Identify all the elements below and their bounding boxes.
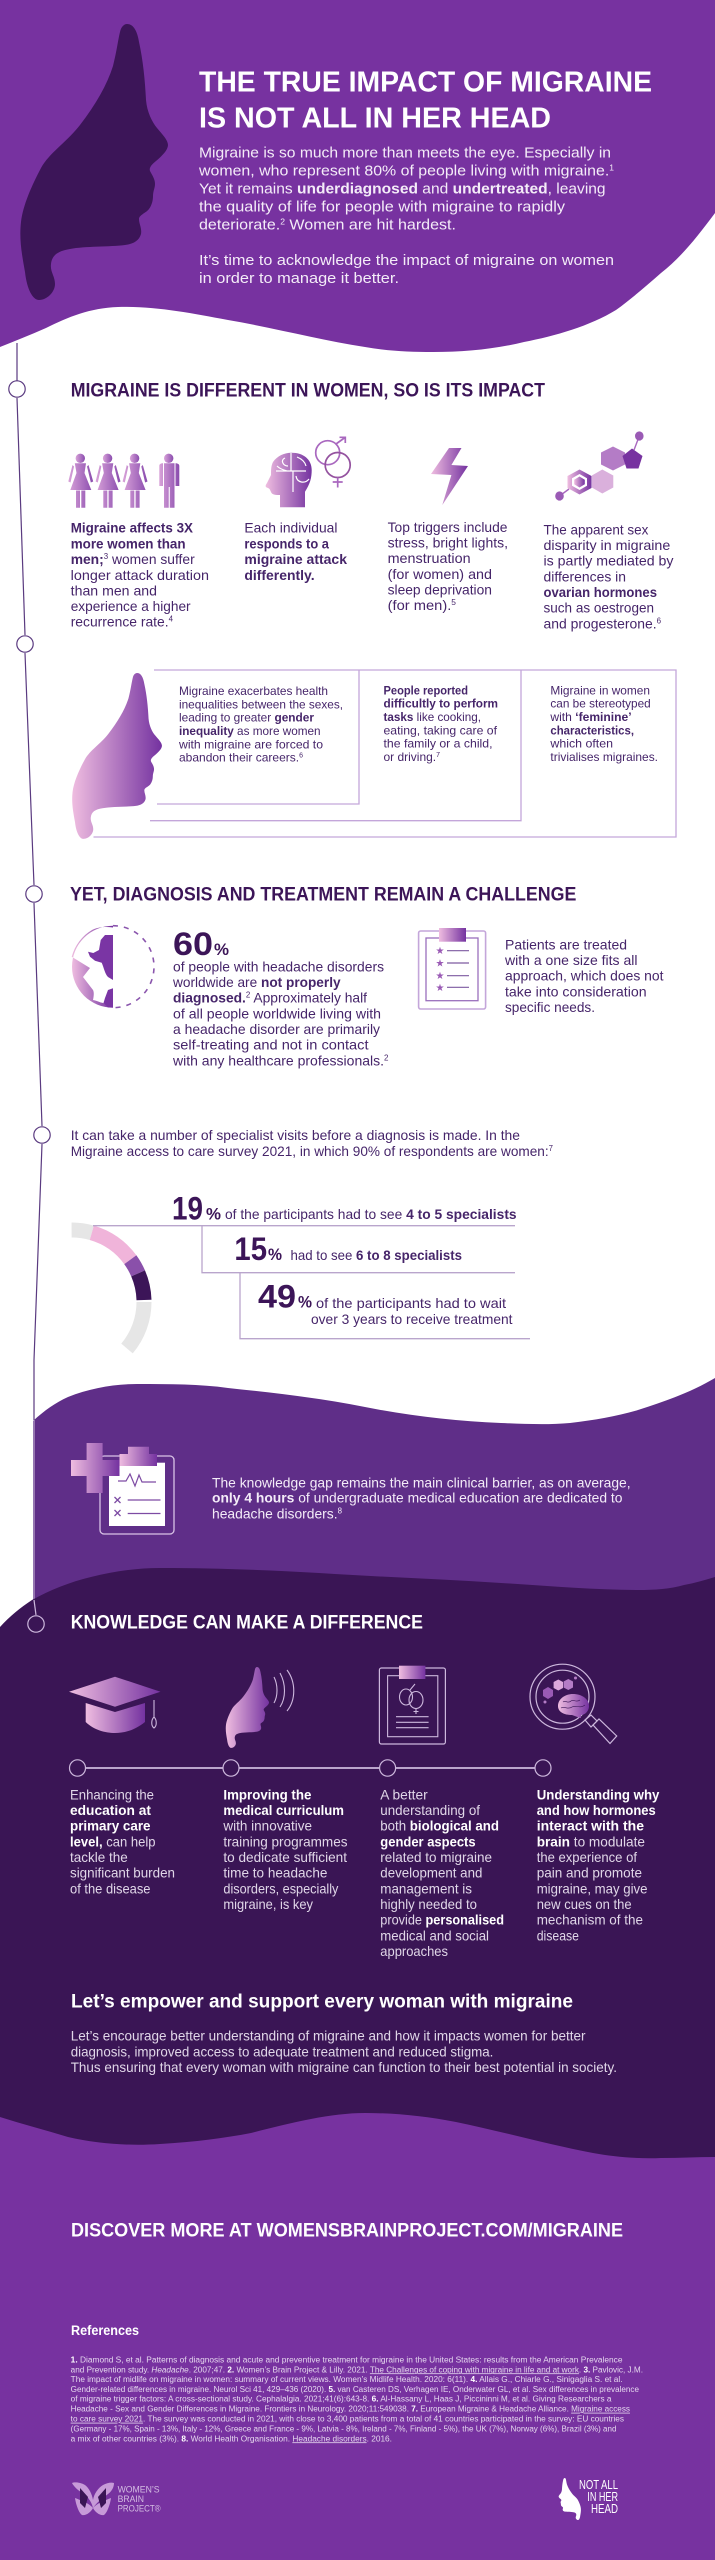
column: hormones and brain: new cues on the xyxy=(537,1896,632,1912)
column: biological and gender: gender aspects xyxy=(380,1833,476,1849)
heading: empower: Let’s empower and support every woman with migraine xyxy=(71,1992,573,2013)
text: not properly diagnosed xyxy=(172,958,389,1068)
text: one size fits all: specific needs. xyxy=(505,999,595,1015)
column: biological and gender: medical and social xyxy=(380,1927,489,1943)
column: primary care: level, can help xyxy=(70,1833,156,1849)
column: biological and gender: A better xyxy=(380,1786,428,1802)
intro text: deteriorate. xyxy=(199,216,275,233)
column: curriculum: time to headache xyxy=(223,1865,328,1881)
references text xyxy=(71,2355,643,2443)
panel text: daily tasks: the family or a child, xyxy=(384,737,492,751)
stat: 49 percent: over 3 years to receive treatment xyxy=(311,1311,513,1327)
intro text: Women are hit hardest. xyxy=(285,216,456,233)
panel text: inequality xyxy=(178,684,343,765)
column: hormones and brain: pain and promote xyxy=(537,1865,642,1881)
column: 3X more women: than men and xyxy=(71,582,157,598)
frames for survey stats xyxy=(93,1226,530,1339)
timeline segment along band xyxy=(34,1420,36,1615)
intro text: It’s time to acknowledge the impact of migraine on women xyxy=(199,252,614,269)
panel text: daily tasks: People reported xyxy=(384,683,468,697)
panel text: stereotypes: characteristics, xyxy=(550,723,634,737)
column: top triggers: sleep deprivation xyxy=(388,582,492,598)
text: empower paragraph: diagnosis, improved access to adequate treatment and reduced stigma. xyxy=(71,2043,493,2059)
icon: speaking face xyxy=(226,1667,294,1748)
column: 3X more women: experience a higher xyxy=(71,598,191,614)
column: primary care: education at xyxy=(70,1802,151,1818)
icon: checklist clipboard xyxy=(419,928,486,1009)
text: not properly diagnosed: diagnosed. xyxy=(173,990,246,1006)
column: biological and gender: provide personalised xyxy=(380,1912,504,1928)
column: hormones and brain: disease xyxy=(537,1927,579,1943)
column: top triggers: (for women) and xyxy=(388,566,492,582)
panel text: inequality: inequality as more women xyxy=(179,724,321,738)
column: individual response: responds to a xyxy=(244,535,329,551)
column: biological and gender: both biological and xyxy=(380,1818,499,1834)
column: 3X more women: women suffer xyxy=(108,551,195,567)
references text: and Prevention study. Headache. 2007;47. 2. Women’s Brain Project & Lilly. 2021. The Challenges of coping with migraine in life and at work . 3. Pavlovic, J.M. xyxy=(71,2365,643,2374)
column: hormones and brain: and how hormones xyxy=(537,1802,656,1818)
column: primary care: significant burden xyxy=(70,1865,175,1881)
column: curriculum: migraine, is key xyxy=(223,1896,313,1912)
heading: diagnosis challenge: YET, DIAGNOSIS AND TREATMENT REMAIN A CHALLENGE xyxy=(70,885,576,906)
stat: 19 percent: of the participants had to see 4 to 5 specialists xyxy=(225,1206,517,1222)
panel text: stereotypes: which often xyxy=(549,737,613,751)
icon: checklist clipboard: ★ xyxy=(436,958,444,970)
text: not properly diagnosed: of all people worldwide living with xyxy=(173,1005,381,1021)
column: 3X more women: longer attack duration xyxy=(71,567,209,583)
icon: three women and one man xyxy=(68,454,179,508)
column: 3X more women: men; xyxy=(71,551,104,567)
icon: checklist clipboard: ★ xyxy=(436,946,444,957)
panel text: inequality: inequalities between the sexes, xyxy=(179,697,343,711)
section band: knowledge gap xyxy=(33,1378,715,1660)
panel text: daily tasks xyxy=(384,683,498,764)
text: knowledge gap: The knowledge gap remains the main clinical barrier, as on average, xyxy=(212,1474,631,1490)
panel texts: impact on women xyxy=(178,683,658,765)
logo: Not All In Her Head: NOT ALL xyxy=(579,2477,618,2492)
column: biological and gender: highly needed to xyxy=(380,1896,477,1912)
icon: 60 percent head circle xyxy=(72,926,154,1008)
stat: 49 percent: of the participants had to wait xyxy=(316,1295,506,1311)
column: individual response: migraine attack xyxy=(244,551,347,567)
column: 3X more women: 3 xyxy=(104,552,109,561)
title: THE TRUE IMPACT OF MIGRAINE xyxy=(199,67,652,99)
stat: 15 percent: % xyxy=(268,1245,282,1264)
text: not properly diagnosed: 2 xyxy=(246,991,251,1000)
logo: Not All In Her Head xyxy=(559,2477,618,2520)
column: biological and gender: related to migraine xyxy=(380,1849,492,1865)
text: empower paragraph: Thus ensuring that every woman with migraine can function to their best potential in society. xyxy=(71,2059,617,2075)
text: not properly diagnosed: with any healthcare professionals. xyxy=(173,1052,384,1068)
icon: hormone molecule xyxy=(555,431,644,501)
logo: Not All In Her Head: IN HER xyxy=(587,2489,618,2504)
column: ovarian hormones: such as oestrogen xyxy=(544,600,654,616)
column: ovarian hormones: 6 xyxy=(657,616,662,625)
column: ovarian hormones: and progesterone. xyxy=(544,615,657,631)
intro text xyxy=(198,145,615,287)
text: empower paragraph: Let’s encourage better understanding of migraine and how it impacts women for better xyxy=(71,2028,586,2044)
icon: lightning bolt xyxy=(431,448,468,505)
column: 3X more women: more women than xyxy=(71,535,186,551)
logo: Women's Brain Project: WOMEN’S xyxy=(118,2485,160,2495)
column: curriculum: with innovative xyxy=(222,1818,312,1834)
text: specialist visits intro: It can take a number of specialist visits before a diagnosis is made. In the xyxy=(71,1127,520,1143)
timeline xyxy=(9,343,50,1420)
references text: Headache - Sex and Gender Differences in Migraine. Frontiers in Neurology. 2020;11:549038. 7. European Migraine & Headache Alliance. Migraine access xyxy=(71,2405,630,2414)
call to action: DISCOVER MORE AT WOMENSBRAINPROJECT.COM/MIGRAINE xyxy=(71,2221,623,2242)
text: four knowledge columns xyxy=(70,1786,660,1959)
icon: magnifier with molecule and brain xyxy=(530,1664,617,1744)
icon: dark face silhouette xyxy=(20,24,168,300)
column: curriculum: to dedicate sufficient xyxy=(223,1849,347,1865)
column: biological and gender xyxy=(380,1786,504,1959)
logo: Women's Brain Project: PROJECT® xyxy=(118,2504,161,2514)
text: specialist visits intro: 7 xyxy=(549,1144,554,1153)
text: one size fits all: take into consideration xyxy=(505,983,647,999)
text: empower paragraph xyxy=(71,2028,617,2075)
column: hormones and brain: mechanism of the xyxy=(537,1912,643,1928)
stat: 15 percent: had to see 6 to 8 specialists xyxy=(290,1247,462,1263)
column: primary care: of the disease xyxy=(70,1880,151,1896)
column: top triggers xyxy=(388,519,508,613)
intro text: 2 xyxy=(280,217,286,226)
panel text: inequality: with migraine are forced to xyxy=(178,737,323,751)
icon: gradient face profile xyxy=(72,673,162,839)
references heading: References xyxy=(71,2323,139,2338)
stat: 49 percent: 49 xyxy=(258,1279,296,1315)
text: not properly diagnosed: self-treating and not in contact xyxy=(173,1037,369,1053)
column: individual response xyxy=(244,520,347,583)
column: ovarian hormones: disparity in migraine xyxy=(544,537,671,553)
column: hormones and brain: Understanding why xyxy=(537,1786,660,1802)
column: 3X more women xyxy=(71,520,209,630)
column: top triggers: 5 xyxy=(451,598,457,607)
stat: 19 percent xyxy=(172,1190,517,1226)
text: knowledge gap: 8 xyxy=(338,1506,343,1515)
text: stat columns xyxy=(71,519,673,631)
logo: Women's Brain Project xyxy=(72,2482,161,2515)
references text: a mix of other countries (3%). 8. World Health Organisation. Headache disorders . 2016. xyxy=(71,2434,392,2443)
stat: 15 percent: 15 xyxy=(234,1231,267,1267)
panel text: stereotypes: can be stereotyped xyxy=(550,697,651,711)
column: top triggers: Top triggers include xyxy=(388,519,508,535)
stat: 60 percent xyxy=(173,926,229,962)
timeline: four steps xyxy=(70,1760,551,1776)
stat: 60 percent: 60 xyxy=(173,926,213,962)
column: biological and gender: development and xyxy=(380,1865,482,1881)
column: hormones and brain: brain to modulate xyxy=(537,1833,645,1849)
column: curriculum xyxy=(222,1786,348,1912)
stat: 15 percent xyxy=(234,1231,462,1267)
column: curriculum: training programmes xyxy=(223,1833,348,1849)
stat: 60 percent: % xyxy=(214,940,229,959)
panel text: inequality: leading to greater gender xyxy=(179,711,314,725)
stat: 19 percent: % xyxy=(206,1204,221,1223)
text: one size fits all: Patients are treated xyxy=(505,936,627,952)
references text: The impact of midlife on migraine in women: summary of current views. Women’s Midlife Health. 2020: 6(11). 4. Allais G., Chiarle G., Sinigaglia S. et al. xyxy=(71,2375,622,2384)
intro text: women, who represent 80% of people living with migraine. xyxy=(199,163,586,180)
panel text: inequality: abandon their careers. xyxy=(179,751,299,765)
text: one size fits all: with a one size fits all xyxy=(504,952,638,968)
text: not properly diagnosed: of people with headache disorders xyxy=(173,958,384,974)
text: knowledge gap xyxy=(212,1474,631,1521)
column: biological and gender: management is xyxy=(380,1880,472,1896)
panel text: stereotypes xyxy=(549,683,658,764)
icon: checklist clipboard: ★ xyxy=(436,971,444,982)
intro text: in order to manage it better. xyxy=(199,270,399,287)
text: not properly diagnosed: 2 xyxy=(384,1053,389,1062)
intro text: Migraine is so much more than meets the eye. Especially in xyxy=(199,145,611,162)
column: top triggers: stress, bright lights, xyxy=(388,535,508,551)
heading: knowledge: KNOWLEDGE CAN MAKE A DIFFERENCE xyxy=(71,1612,423,1633)
icon: head with puzzle and gender symbols xyxy=(266,437,350,507)
column: hormones and brain: interact with the xyxy=(537,1818,644,1834)
column: biological and gender: understanding of xyxy=(380,1802,480,1818)
panel text: daily tasks: eating, taking care of xyxy=(384,723,498,737)
column: biological and gender: approaches xyxy=(380,1943,448,1959)
title xyxy=(199,67,652,135)
column: hormones and brain xyxy=(537,1786,660,1943)
column: top triggers: menstruation xyxy=(388,550,471,566)
text: specialist visits intro: Migraine access to care survey 2021, in which 90% of respondents are women: xyxy=(71,1143,563,1159)
title: IS NOT ALL IN HER HEAD xyxy=(199,103,551,135)
text: not properly diagnosed: a headache disorder are primarily xyxy=(173,1021,380,1037)
panel text: stereotypes: trivialises migraines. xyxy=(550,750,658,764)
text: not properly diagnosed: Approximately half xyxy=(250,990,367,1006)
chart: arc of survey proportions xyxy=(72,1230,144,1348)
stat: 49 percent: % xyxy=(298,1293,312,1312)
references text: (Germany - 17%, Spain - 13%, Italy - 12%, Greece and France - 9%, Latvia - 8%, Ireland - 7%, Finland - 5%), the UK (7%), Norway (6%), Brazil (3%) and xyxy=(71,2424,616,2433)
section band: header xyxy=(0,0,715,352)
panel text: daily tasks: 7 xyxy=(436,752,440,759)
panel text: inequality: 6 xyxy=(299,753,303,760)
heading: different in women: MIGRAINE IS DIFFERENT IN WOMEN, SO IS ITS IMPACT xyxy=(71,381,545,402)
panel text: stereotypes: Migraine in women xyxy=(550,683,650,697)
column: primary care: Enhancing the xyxy=(70,1786,154,1802)
column: primary care xyxy=(70,1786,175,1896)
panel text: inequality: Migraine exacerbates health xyxy=(179,684,328,698)
column: top triggers: (for men). xyxy=(388,597,448,613)
column: ovarian hormones: ovarian hormones xyxy=(544,584,657,600)
panel text: daily tasks: or driving. xyxy=(384,750,436,764)
column: curriculum: medical curriculum xyxy=(223,1802,344,1818)
column: individual response: Each individual xyxy=(244,520,337,536)
column: individual response: differently. xyxy=(244,567,315,583)
text: specialist visits intro xyxy=(71,1127,554,1159)
section band: knowledge makes a difference xyxy=(0,1568,715,2200)
bracket frames around impact panels xyxy=(94,670,676,837)
references text: 1. Diamond S, et al. Patterns of diagnosis and acute and preventive treatment for migraine in the United States: results from the American Prevalence xyxy=(71,2355,623,2364)
text: not properly diagnosed: worldwide are not properly xyxy=(172,974,341,990)
icon: graduation cap xyxy=(69,1677,160,1733)
intro text: the quality of life for people with migraine to rapidly xyxy=(199,199,566,216)
logo: Women's Brain Project: BRAIN xyxy=(118,2494,144,2504)
intro text: Yet it remains underdiagnosed and undertreated, leaving xyxy=(199,181,606,198)
column: primary care: primary care xyxy=(70,1818,151,1834)
column: ovarian hormones: is partly mediated by xyxy=(544,553,674,569)
references text: of migraine trigger factors: A cross-sectional study. Cephalalgia. 2021;41(6):643-8. 6. Al-Hassany L, Haas J, Piccininni M, et al. Giving Researchers a xyxy=(71,2395,612,2404)
icon: cross and medical clipboard xyxy=(71,1443,174,1534)
column: ovarian hormones: The apparent sex xyxy=(544,521,648,537)
text: one size fits all: approach, which does not xyxy=(505,968,664,984)
column: hormones and brain: migraine, may give xyxy=(537,1880,648,1896)
stat: 19 percent: 19 xyxy=(172,1190,203,1226)
column: primary care: tackle the xyxy=(70,1849,128,1865)
icon: clipboard with gender symbols xyxy=(379,1666,445,1744)
column: curriculum: Improving the xyxy=(223,1786,312,1802)
column: ovarian hormones: differences in xyxy=(544,568,626,584)
panel text: stereotypes: with ‘feminine’ xyxy=(549,710,632,724)
text: knowledge gap: only 4 hours of undergraduate medical education are dedicated to xyxy=(212,1490,623,1506)
column: 3X more women: recurrence rate. xyxy=(71,614,170,630)
column: hormones and brain: the experience of xyxy=(537,1849,637,1865)
stat: 49 percent xyxy=(258,1279,513,1327)
panel text: daily tasks: tasks like cooking, xyxy=(384,710,481,724)
section band: footer xyxy=(0,2113,715,2560)
references text: Gender-related differences in migraine. Neurol Sci 41, 429–436 (2020). 5. van Casteren DS, Verhagen IE, Onderwater GL, et al. Sex differences in prevalence xyxy=(71,2385,640,2394)
timeline node: knowledge xyxy=(28,1600,44,1632)
text: one size fits all xyxy=(504,936,664,1015)
text: knowledge gap: headache disorders. xyxy=(212,1505,339,1521)
icon: checklist clipboard: ★ xyxy=(436,983,444,994)
references text: to care survey 2021 . The survey was conducted in 2021, with close to 3,400 patients from a total of 41 countries participated in the survey: EU countries xyxy=(71,2415,624,2424)
column: ovarian hormones xyxy=(544,521,674,631)
column: 3X more women: 4 xyxy=(169,615,174,624)
column: 3X more women: Migraine affects 3X xyxy=(71,520,194,536)
panel text: daily tasks: difficultly to perform xyxy=(384,697,498,711)
intro text: 1 xyxy=(609,164,615,173)
logo: Not All In Her Head: HEAD xyxy=(591,2501,618,2516)
column: curriculum: disorders, especially xyxy=(223,1880,338,1896)
